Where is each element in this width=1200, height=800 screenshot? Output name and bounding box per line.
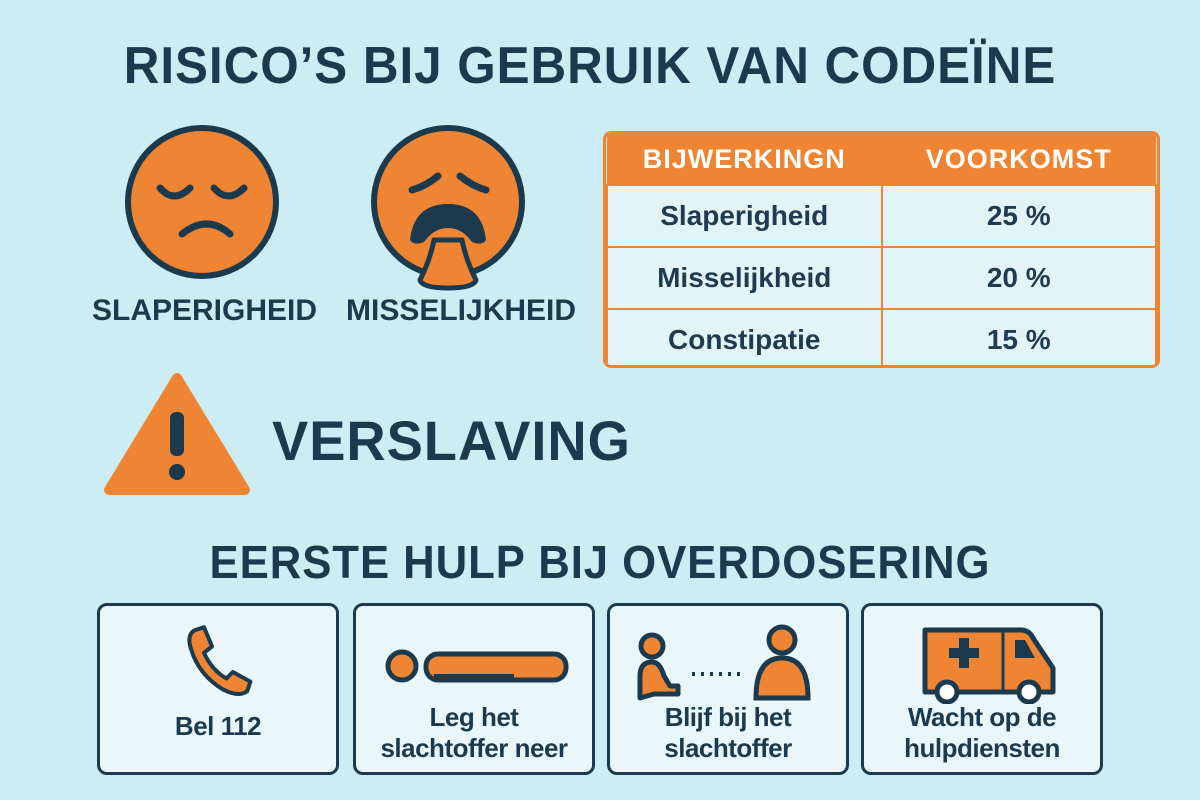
- icon: nauseous face: [371, 125, 525, 290]
- table: bijwerkingen: Slaperigheid: [660, 200, 828, 231]
- panel: leg neer: Leg het: [430, 702, 518, 732]
- table: bijwerkingen: 25 %: [987, 200, 1051, 231]
- heading: eerste hulp: EERSTE HULP BIJ OVERDOSERING: [210, 536, 990, 588]
- table: bijwerkingen: 20 %: [987, 262, 1051, 293]
- icon: warning triangle: [104, 373, 250, 495]
- panel: wacht: [861, 603, 1103, 775]
- title: RISICO’S BIJ GEBRUIK VAN CODEÏNE: [124, 37, 1056, 95]
- label: slaperigheid: SLAPERIGHEID: [92, 294, 317, 327]
- heading: verslaving: VERSLAVING: [272, 409, 631, 472]
- table: bijwerkingen: BIJWERKINGN: [643, 144, 846, 174]
- icon: ambulance: [922, 628, 1056, 704]
- panel: blijf bij: slachtoffer: [664, 733, 792, 763]
- label: misselijkheid: MISSELIJKHEID: [346, 294, 576, 327]
- table: bijwerkingen: 15 %: [987, 324, 1051, 355]
- table: bijwerkingen: [603, 131, 1160, 368]
- panel: blijf bij: [607, 603, 849, 775]
- icon: sleepy face: [125, 125, 279, 279]
- icon: phone: [187, 625, 252, 696]
- panel: leg neer: [353, 603, 595, 775]
- table: bijwerkingen: VOORKOMST: [926, 144, 1112, 174]
- table: bijwerkingen: Misselijkheid: [657, 262, 831, 293]
- panel: bel 112: Bel 112: [175, 711, 261, 741]
- panel: bel 112: [97, 603, 339, 775]
- panel: wacht: hulpdiensten: [904, 733, 1060, 763]
- panel: blijf bij: Blijf bij het: [665, 702, 791, 732]
- panel: wacht: Wacht op de: [908, 702, 1056, 732]
- icon: lying person: [386, 650, 568, 682]
- icon: two persons: [638, 624, 810, 700]
- table: bijwerkingen: Constipatie: [668, 324, 820, 355]
- panel: leg neer: slachtoffer neer: [380, 733, 568, 763]
